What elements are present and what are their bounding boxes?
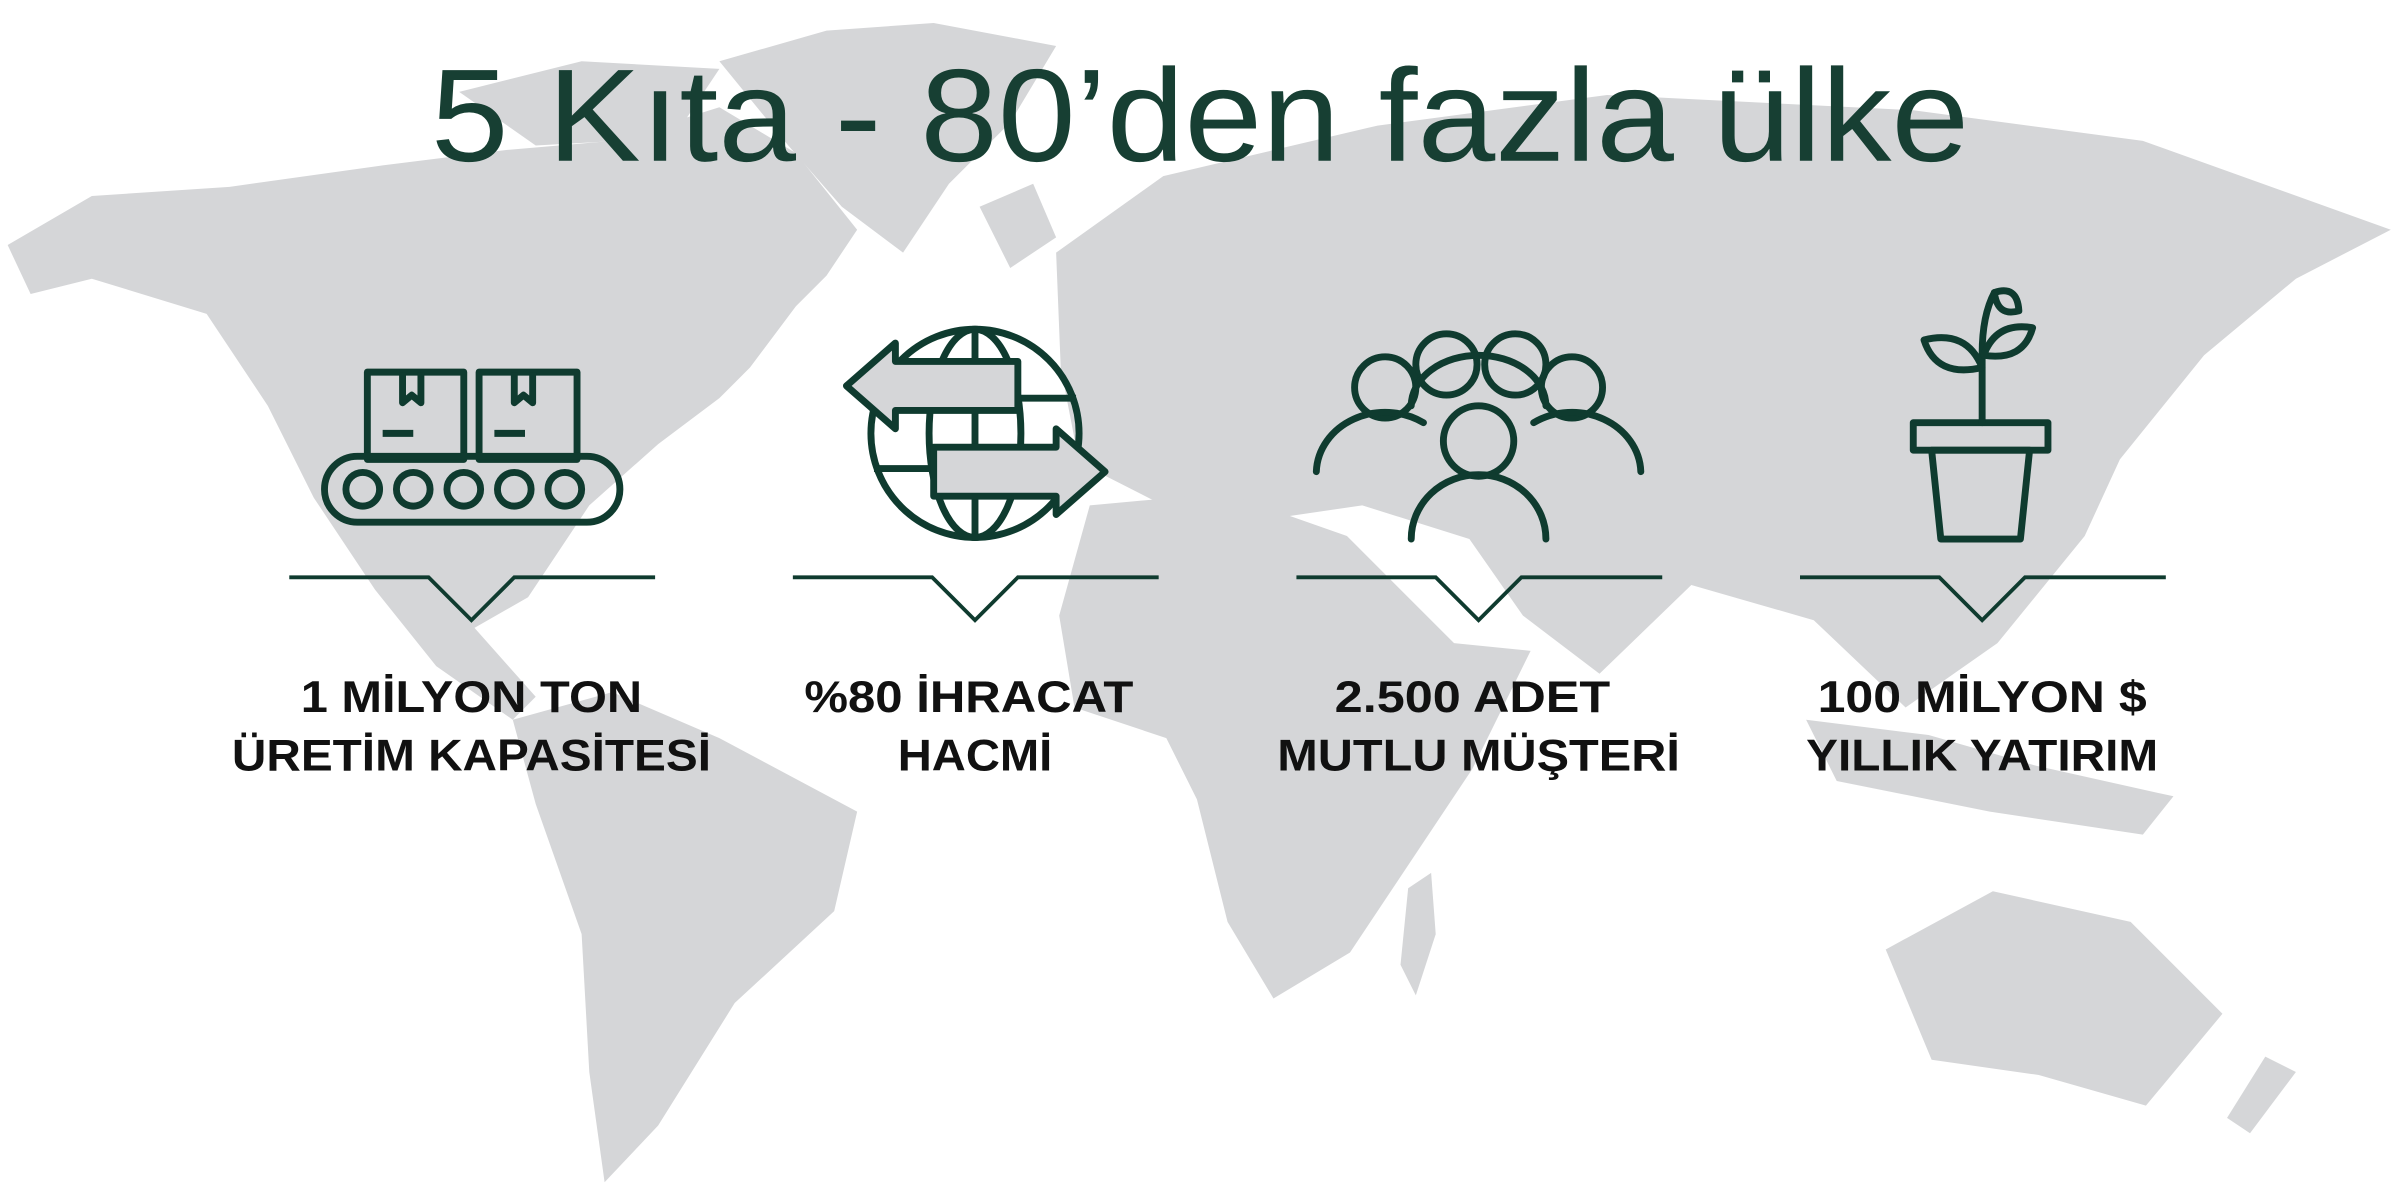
stat: investment: YILLIK YATIRIM	[1806, 731, 2158, 780]
stat: production capacity	[232, 372, 711, 780]
icon: plant in pot	[1913, 291, 2048, 539]
stat: export volume: HACMİ	[898, 731, 1052, 780]
divider with chevron	[1296, 577, 1662, 620]
icon: group of people	[1316, 334, 1641, 539]
label: 1 MİLYON TON	[301, 673, 642, 722]
stat: customers	[1277, 334, 1680, 780]
icon: boxes on conveyor	[324, 372, 620, 522]
label: 2.500 ADET	[1335, 673, 1610, 722]
stat: investment	[1800, 291, 2166, 780]
icon: globe with arrows	[846, 329, 1105, 538]
label: %80 İHRACAT	[804, 673, 1133, 722]
stat: export volume	[793, 329, 1159, 780]
divider with chevron	[289, 577, 655, 620]
divider with chevron	[793, 577, 1159, 620]
stat: customers: MUTLU MÜŞTERİ	[1277, 731, 1680, 780]
stat: production capacity: ÜRETİM KAPASİTESİ	[232, 731, 711, 780]
label: 100 MİLYON $	[1818, 673, 2147, 722]
title: 5 Kıta - 80’den fazla ülke	[431, 42, 1969, 189]
divider with chevron	[1800, 577, 2166, 620]
